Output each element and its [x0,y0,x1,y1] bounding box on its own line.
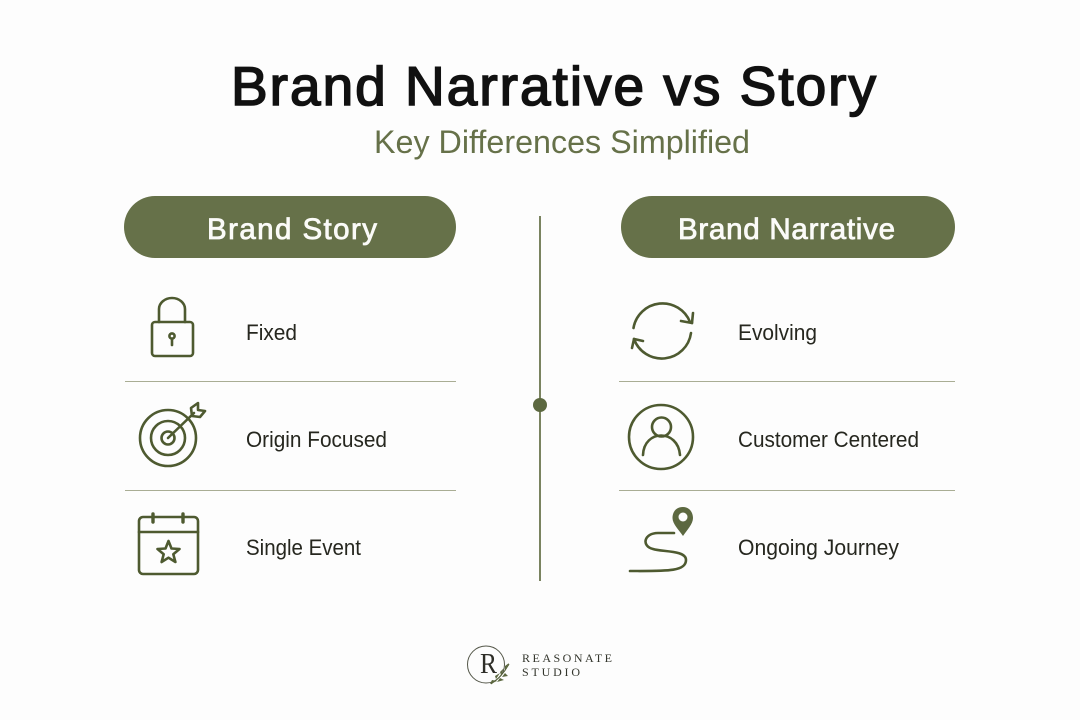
title: Brand Narrative vs Story [231,55,876,117]
label: fixed: Fixed [246,320,297,345]
logo wordmark: STUDIO [522,665,580,679]
heading pill: brand story [124,196,456,258]
label: single event: Single Event [246,535,361,560]
center divider with dot [533,216,547,581]
label: origin focused: Origin Focused [246,427,387,452]
label: customer centered: Customer Centered [738,427,919,452]
icon: lock [152,298,193,356]
logo mark: R [480,648,498,680]
subtitle: Key Differences Simplified [374,124,750,160]
icon: target with arrow [140,403,205,466]
heading pill: brand narrative [621,196,955,258]
icon: calendar with star [139,514,198,574]
label: evolving: Evolving [738,320,817,345]
logo mark [468,646,509,684]
heading pill: brand narrative: Brand Narrative [678,213,895,246]
label: customer journey: Ongoing Journey [738,535,899,560]
icon: cycle arrows [632,303,693,359]
icon: journey path with pin [630,507,693,571]
logo wordmark [522,651,612,679]
logo wordmark: REASONATE [522,651,612,665]
icon: customer in circle [629,405,693,469]
panel: brand story [124,196,456,574]
heading pill: brand story: Brand Story [207,213,377,246]
footer logo [468,646,612,684]
panel: brand narrative [619,196,955,571]
